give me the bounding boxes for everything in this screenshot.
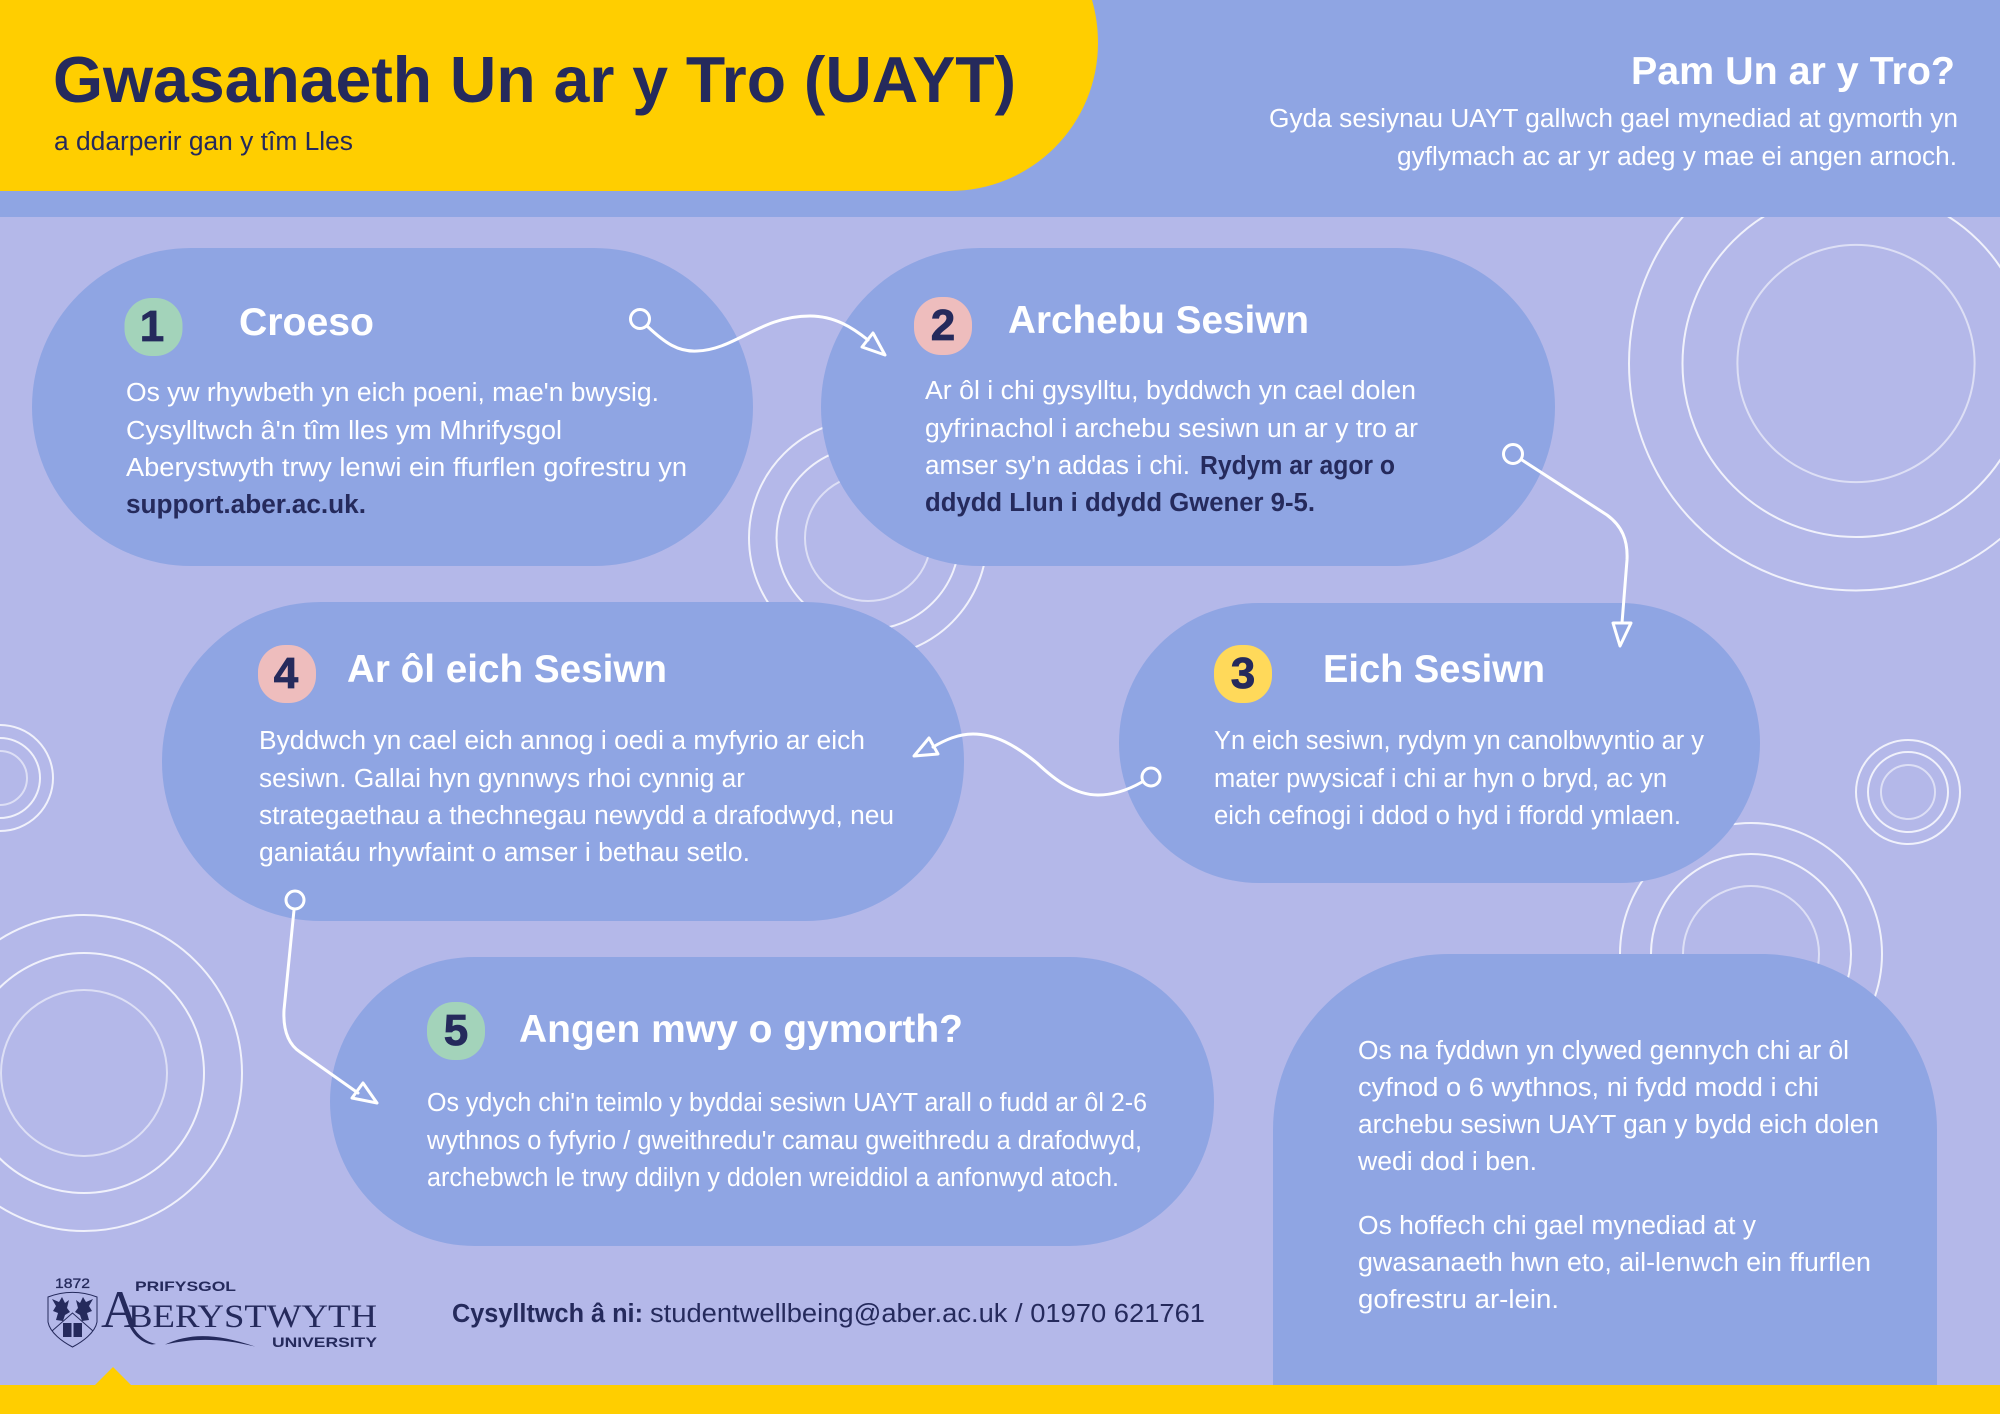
bottom yellow bar with marker <box>0 1367 2000 1414</box>
arrow: step 3 to step 4 <box>914 734 1160 795</box>
icon: number 4 badge: 4 <box>274 649 299 698</box>
header band <box>0 0 2000 217</box>
heading: Angen mwy o gymorth: Angen mwy o gymorth? <box>519 1008 963 1051</box>
text: step 3 body: eich cefnogi i ddod o hyd i ffordd ymlaen. <box>1214 802 1681 830</box>
text: expiry note body: cyfnod o 6 wythnos, ni fydd modd i chi <box>1358 1074 1819 1102</box>
text: step 5 body: archebwch le trwy ddilyn y ddolen wreiddiol a anfonwyd atoch. <box>427 1164 1119 1192</box>
decorative ring groups <box>0 136 2000 1231</box>
header: why one at a time: gyflymach ac ar yr adeg y mae ei angen arnoch. <box>1397 143 1957 171</box>
icon: crest shield <box>48 1292 97 1347</box>
text: step 3 body: mater pwysicaf i chi ar hyn o bryd, ac yn <box>1214 765 1667 793</box>
logo swoosh <box>128 1322 255 1346</box>
heading: Eich Sesiwn: Eich Sesiwn <box>1323 648 1545 691</box>
text: expiry note body: Os hoffech chi gael mynediad at y <box>1358 1212 1756 1240</box>
text: step 1 body: support.aber.ac.uk. <box>126 491 366 519</box>
icon: number 1 badge: 1 <box>140 302 164 351</box>
panel: step 1 Croeso <box>32 248 753 566</box>
icon: number 2 badge <box>914 297 972 355</box>
text: expiry note body: wedi dod i ben. <box>1357 1148 1537 1176</box>
text: step 4 body: ganiatáu rhywfaint o amser i bethau setlo. <box>259 839 750 867</box>
text: step 1 body: Os yw rhywbeth yn eich poeni, mae'n bwysig. <box>126 379 659 407</box>
header: why one at a time <box>1269 50 1958 171</box>
text: expiry note body <box>1357 1037 1879 1314</box>
heading: Croeso: Croeso <box>239 301 374 344</box>
text: step 2 body: ddydd Llun i ddydd Gwener 9-5. <box>925 489 1315 517</box>
text: step 4 body: strategaethau a thechnegau newydd a drafodwyd, neu <box>259 802 894 830</box>
text: step 1 body: Aberystwyth trwy lenwi ein ffurflen gofrestru yn <box>126 454 687 482</box>
logo: Aberystwyth University: UNIVERSITY <box>272 1334 378 1350</box>
icon: number 5 badge: 5 <box>444 1006 468 1055</box>
contact line: studentwellbeing@aber.ac.uk / 01970 621761 <box>650 1300 1205 1328</box>
panel: step 2 Archebu Sesiwn <box>821 248 1555 566</box>
icon: number 5 badge <box>427 1002 485 1060</box>
text: step 5 body: wythnos o fyfyrio / gweithredu'r camau gweithredu a drafodwyd, <box>426 1127 1142 1155</box>
panel: step 3 Eich Sesiwn <box>1119 603 1760 883</box>
heading: Archebu Sesiwn: Archebu Sesiwn <box>1008 299 1309 342</box>
text: expiry note body: gwasanaeth hwn eto, ail-lenwch ein ffurflen <box>1358 1249 1871 1277</box>
text: step 2 body: Rydym ar agor o <box>1200 452 1395 480</box>
logo: Aberystwyth University: BERYSTWYTH <box>128 1299 377 1335</box>
panel: expiry note <box>1273 954 1937 1385</box>
text: step 3 body <box>1214 727 1704 830</box>
header: why one at a time: Gyda sesiynau UAYT gallwch gael mynediad at gymorth yn <box>1269 105 1958 133</box>
arrow: step 4 to step 5 <box>284 891 377 1103</box>
text: step 4 body: sesiwn. Gallai hyn gynnwys rhoi cynnig ar <box>259 765 746 793</box>
text: expiry note body: Os na fyddwn yn clywed gennych chi ar ôl <box>1358 1037 1849 1065</box>
panel: step 4 Ar ôl eich Sesiwn <box>162 602 964 921</box>
logo: Aberystwyth University <box>48 1275 378 1350</box>
icon: number 3 badge: 3 <box>1231 649 1255 698</box>
logo: Aberystwyth University: A <box>101 1281 139 1339</box>
icon: number 2 badge: 2 <box>931 301 955 350</box>
contact line <box>452 1300 1205 1328</box>
arrow: step 1 to step 2 <box>630 310 885 355</box>
contact line: Cysylltwch â ni: <box>452 1300 643 1328</box>
text: step 5 body: Os ydych chi'n teimlo y byddai sesiwn UAYT arall o fudd ar ôl 2-6 <box>427 1089 1147 1117</box>
text: step 1 body <box>126 379 687 519</box>
header: why one at a time: Pam Un ar y Tro? <box>1631 50 1955 93</box>
text: step 5 body <box>426 1089 1147 1192</box>
text: step 2 body: amser sy'n addas i chi. <box>925 452 1190 480</box>
arrow: step 2 to step 3 <box>1504 444 1631 646</box>
text: expiry note body: archebu sesiwn UAYT gan y bydd eich dolen <box>1358 1111 1879 1139</box>
panel: step 5 Angen mwy o gymorth <box>330 957 1214 1246</box>
logo: Aberystwyth University: 1872 <box>55 1275 90 1291</box>
text: step 4 body <box>259 727 894 867</box>
logo: Aberystwyth University: PRIFYSGOL <box>135 1278 237 1294</box>
text: step 2 body: Ar ôl i chi gysylltu, byddwch yn cael dolen <box>925 377 1416 405</box>
text: expiry note body: gofrestru ar-lein. <box>1358 1286 1559 1314</box>
text: step 1 body: Cysylltwch â'n tîm lles ym Mhrifysgol <box>126 417 562 445</box>
text: step 3 body: Yn eich sesiwn, rydym yn canolbwyntio ar y <box>1214 727 1704 755</box>
heading: Ar ôl eich Sesiwn: Ar ôl eich Sesiwn <box>347 648 667 691</box>
icon: number 1 badge <box>124 298 182 356</box>
text: step 2 body <box>925 377 1419 517</box>
yellow title panel <box>0 0 1098 191</box>
title: Gwasanaeth Un ar y Tro (UAYT) <box>53 43 1016 116</box>
icon: number 3 badge <box>1214 645 1272 703</box>
text: step 2 body: gyfrinachol i archebu sesiwn un ar y tro ar <box>925 415 1419 443</box>
subtitle: a ddarperir gan y tîm Lles <box>54 128 353 156</box>
text: step 4 body: Byddwch yn cael eich annog i oedi a myfyrio ar eich <box>259 727 865 755</box>
icon: number 4 badge <box>258 645 316 703</box>
